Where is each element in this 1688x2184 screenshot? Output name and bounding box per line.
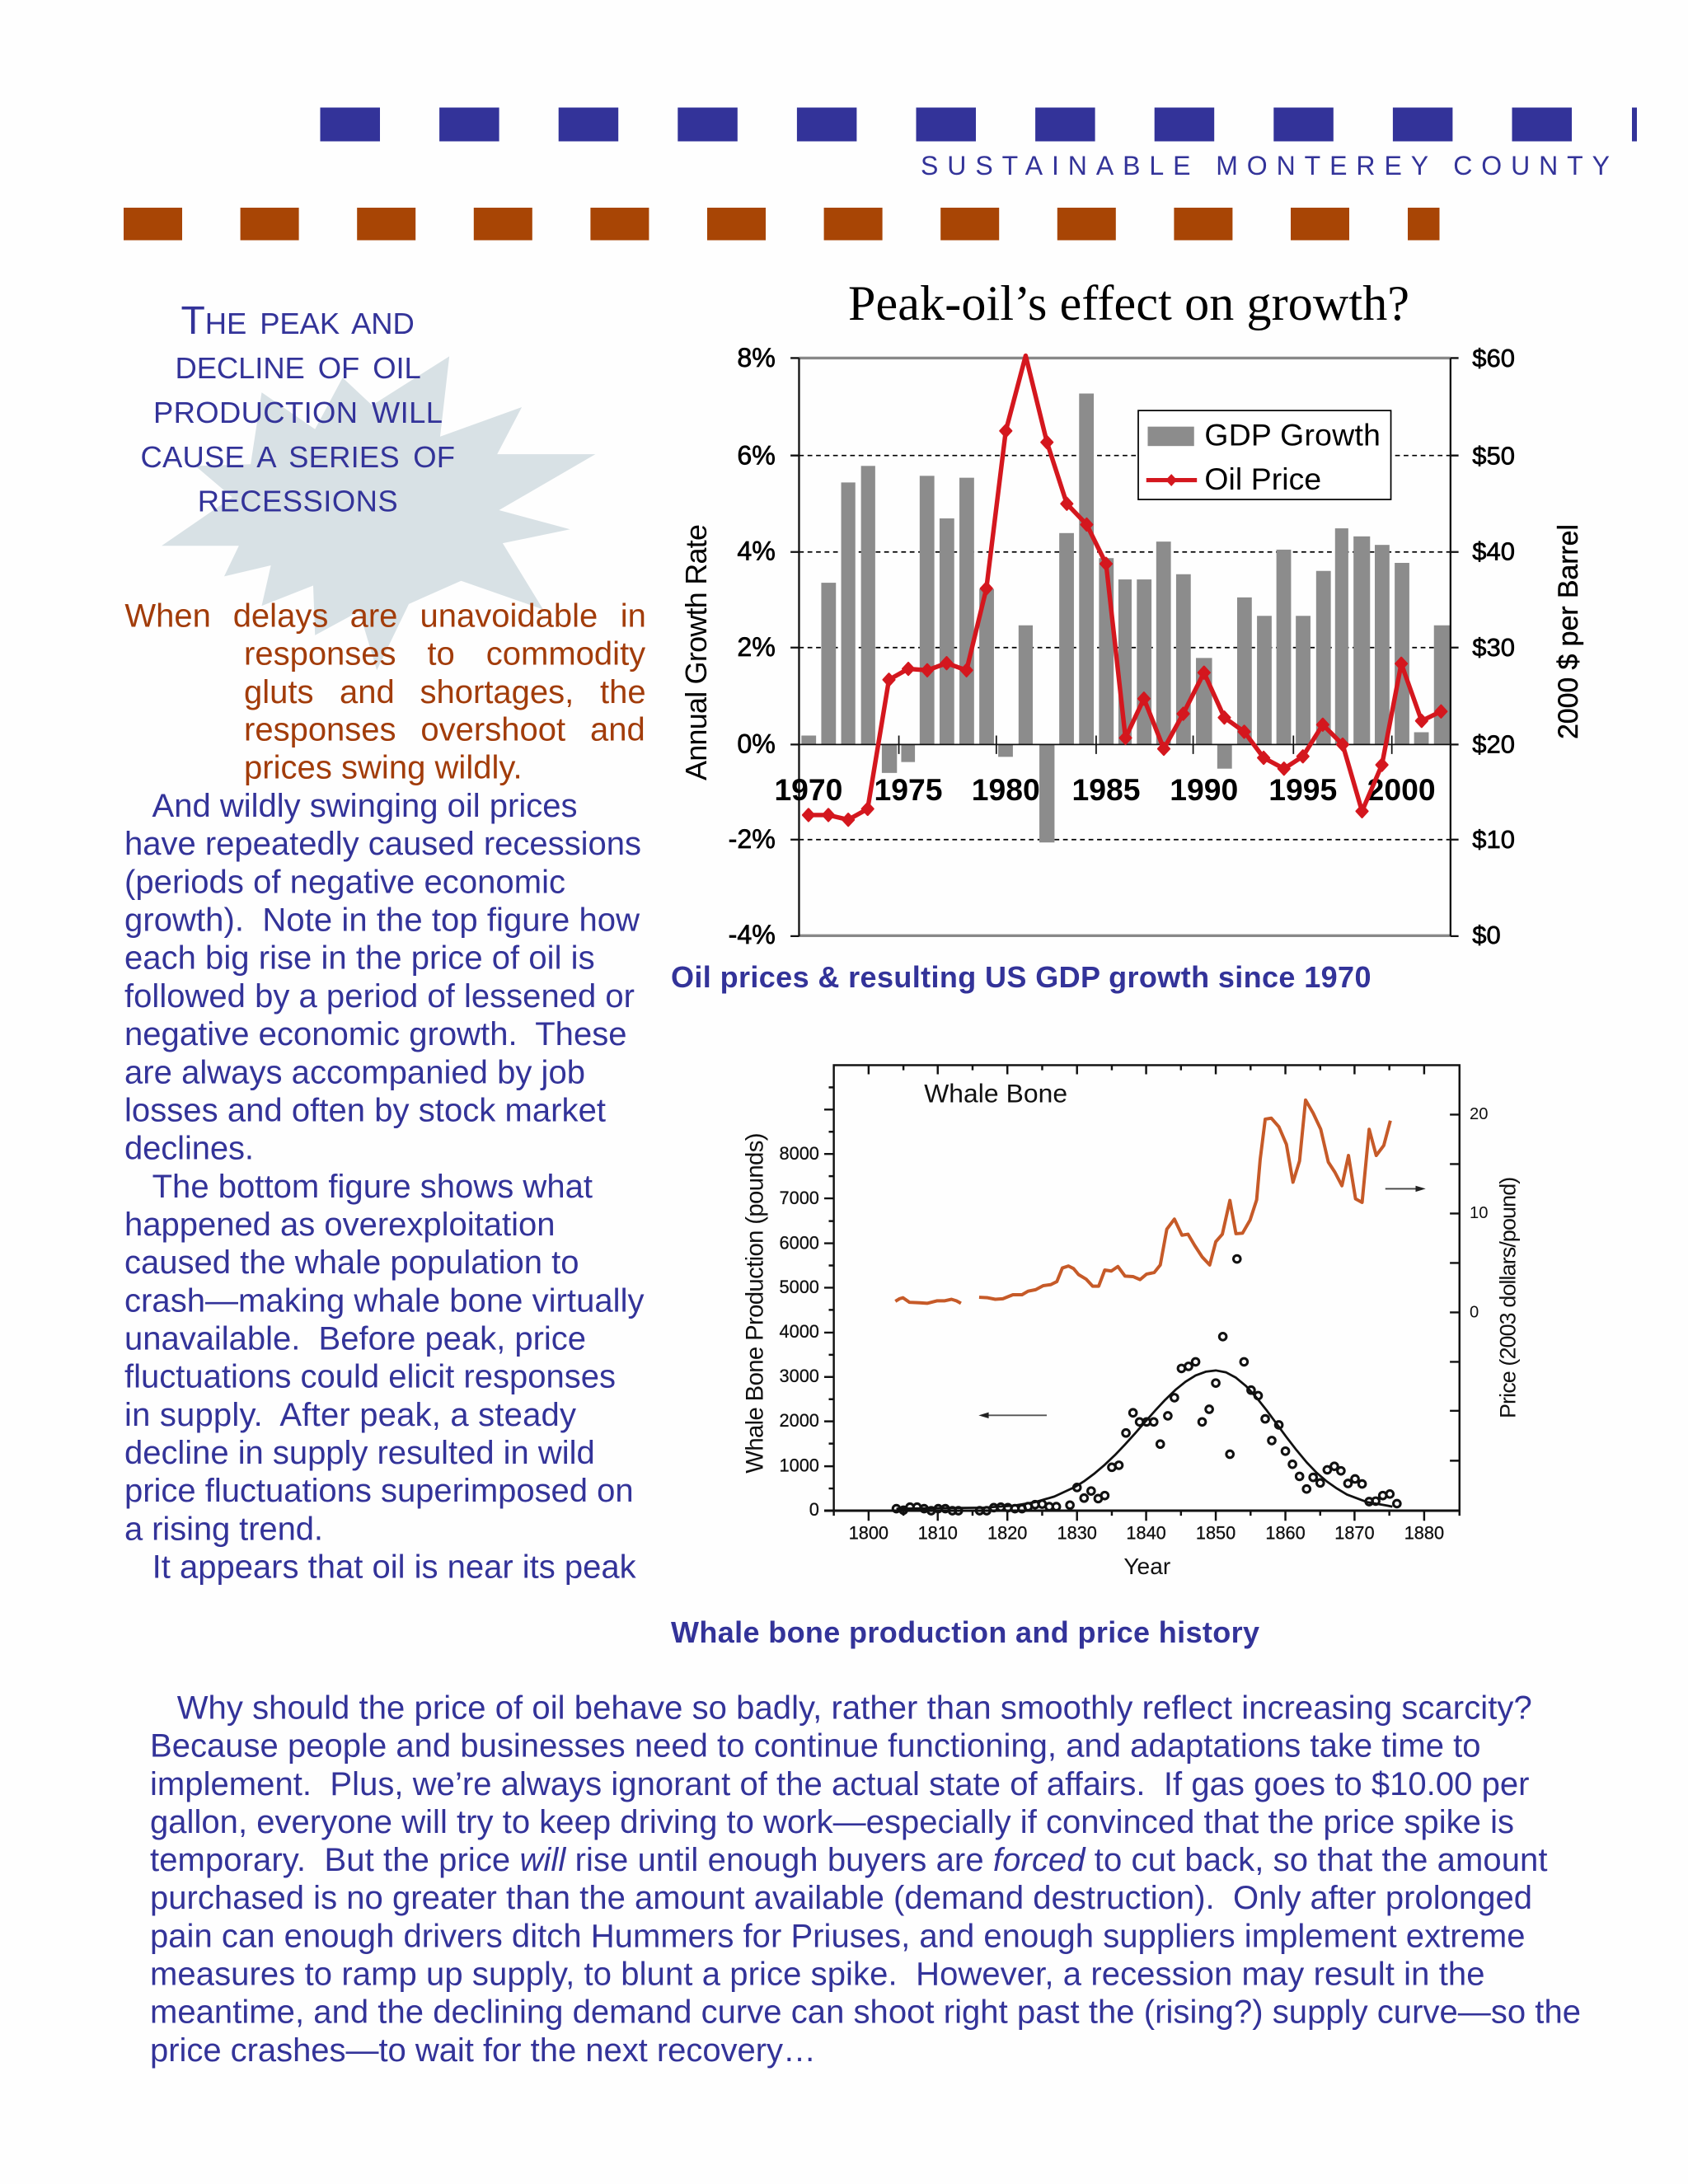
series label: Whale Bone [924, 1079, 1067, 1108]
text block: delays paragraph: overshoot [420, 712, 565, 748]
text block: delays paragraph: unavoidable [420, 598, 598, 635]
text block: delays paragraph: in [621, 598, 646, 635]
text block: left column body: are always accompanied by job [124, 1054, 585, 1090]
text block: bottom paragraph: gallon, everyone will try to keep driving to work—especially if convinced that the price spike is [150, 1804, 1514, 1840]
left axis labels: 2000 [780, 1410, 819, 1431]
text block: left column body: decline in supply resulted in wild [124, 1435, 595, 1471]
left axis labels: 8% [737, 343, 776, 373]
left axis title: Whale Bone Production (pounds) [741, 1132, 768, 1474]
right axis labels: 10 [1470, 1204, 1488, 1222]
fitted production curve [897, 1371, 1392, 1509]
right axis labels: $20 [1472, 730, 1515, 759]
left axis labels: 8000 [780, 1143, 819, 1164]
chart: oil prices and GDP growth [679, 343, 1584, 949]
text block: left column body: The bottom figure shows what [152, 1169, 593, 1205]
text block: left column body: losses and often by stock market [124, 1092, 606, 1128]
text block: left column body: (periods of negative economic [124, 864, 565, 900]
year labels: 1985 [1071, 772, 1140, 807]
text block: delays paragraph: responses [244, 636, 396, 673]
GDP growth bars [801, 393, 1451, 842]
x axis labels: 1870 [1334, 1522, 1375, 1543]
left axis labels: 1000 [780, 1455, 819, 1475]
caption: oil chart: Oil prices & resulting US GDP growth since 1970 [671, 960, 1372, 994]
text block: left column body: fluctuations could elicit responses [124, 1359, 616, 1395]
x axis labels: 1800 [849, 1522, 889, 1543]
text block: delays paragraph: gluts [244, 674, 313, 710]
text block: bottom paragraph: purchased is no greater than the amount available (demand destruction). Only after prolonged [150, 1880, 1532, 1916]
x axis labels: 1880 [1404, 1522, 1444, 1543]
year labels: 1995 [1268, 772, 1337, 807]
production data points [893, 1255, 1400, 1514]
text block: delays paragraph: prices swing wildly. [244, 750, 523, 786]
text block: delays paragraph: and [340, 674, 395, 710]
text block: delays paragraph: When [124, 598, 211, 635]
text block: bottom paragraph: pain can enough drivers ditch Hummers for Priuses, and enough suppliers implement extreme [150, 1918, 1525, 1954]
year labels: 1990 [1170, 772, 1238, 807]
text block: bottom paragraph [150, 1690, 1581, 2069]
right axis labels: $10 [1472, 825, 1515, 854]
left axis title: Annual Growth Rate [679, 524, 713, 780]
right axis labels [1470, 1105, 1488, 1322]
text block: delays paragraph: responses [244, 712, 396, 748]
left axis labels: 4000 [780, 1321, 819, 1342]
text block: left column body: happened as overexploitation [124, 1207, 556, 1243]
text block: bottom paragraph: Why should the price of oil behave so badly, rather than smoothly reflect increasing scarcity? [177, 1690, 1532, 1726]
text block: delays paragraph: shortages, [420, 674, 574, 710]
text block: bottom paragraph: meantime, and the declining demand curve can shoot right past the (rising?) supply curve—so the [150, 1994, 1581, 2031]
left axis labels: 0% [737, 729, 776, 759]
text block: delays paragraph [124, 598, 646, 786]
left axis labels: 7000 [780, 1188, 819, 1208]
text block: left column body: each big rise in the price of oil is [124, 940, 595, 977]
right axis labels: 0 [1470, 1304, 1479, 1322]
chart: whale bone production and price [741, 1065, 1521, 1579]
year labels: 1970 [774, 772, 842, 807]
oil price line [803, 356, 1447, 826]
right axis labels: $50 [1472, 442, 1515, 471]
left axis labels: 2% [737, 632, 776, 662]
text block: delays paragraph: the [600, 674, 646, 710]
year labels: 2000 [1367, 772, 1436, 807]
right axis labels: $60 [1472, 344, 1515, 373]
text block: bottom paragraph: implement. Plus, we’re always ignorant of the actual state of affairs. If gas goes to $10.00 per [150, 1766, 1530, 1802]
x axis labels: 1830 [1057, 1522, 1097, 1543]
arrow: production to left axis [978, 1413, 1047, 1418]
heading: peak and decline: DECLINE OF OIL [175, 351, 421, 385]
text block: bottom paragraph: Because people and businesses need to continue functioning, and adaptations take time to [150, 1727, 1480, 1764]
caption: whale chart: Whale bone production and price history [671, 1615, 1259, 1649]
heading: peak and decline: PRODUCTION WILL [153, 396, 443, 429]
left axis labels: 4% [737, 537, 776, 566]
x axis labels: 1810 [918, 1522, 958, 1543]
text block: left column body: caused the whale population to [124, 1244, 579, 1281]
heading: peak and decline: CAUSE A SERIES OF [140, 440, 455, 474]
right axis labels: 20 [1470, 1105, 1488, 1123]
heading: peak and decline: RECESSIONS [198, 484, 398, 518]
left axis labels [729, 343, 776, 949]
frame and ticks [824, 1065, 1460, 1521]
text block: left column body: followed by a period of lessened or [124, 978, 635, 1015]
x axis labels [849, 1522, 1444, 1543]
text block: left column body: It appears that oil is near its peak [152, 1549, 637, 1586]
left axis labels: -2% [729, 824, 776, 854]
text block: left column body [124, 788, 645, 1586]
text block: left column body: declines. [124, 1131, 254, 1167]
text block: left column body: price fluctuations superimposed on [124, 1473, 634, 1509]
legend: Oil Price [1204, 462, 1321, 496]
right axis title: Price (2003 dollars/pound) [1496, 1177, 1521, 1418]
text block: delays paragraph: to [427, 636, 455, 673]
starburst shape behind heading [162, 356, 595, 670]
x axis title: Year [1123, 1554, 1170, 1579]
text block: left column body: a rising trend. [124, 1511, 323, 1547]
chart frame and axes [790, 358, 1459, 936]
left axis labels [780, 1143, 819, 1520]
x axis labels: 1860 [1265, 1522, 1306, 1543]
x axis labels: 1850 [1196, 1522, 1236, 1543]
x axis labels: 1820 [987, 1522, 1027, 1543]
left axis labels: -4% [729, 920, 776, 949]
legend [1138, 410, 1391, 499]
left axis labels: 6% [737, 441, 776, 471]
year labels: 1975 [874, 772, 943, 807]
right axis labels: $0 [1472, 921, 1501, 949]
right axis labels [1472, 344, 1515, 949]
text block: left column body: negative economic growth. These [124, 1016, 626, 1052]
left axis labels: 6000 [780, 1232, 819, 1253]
heading: peak and decline: THE PEAK AND [181, 299, 415, 343]
heading: peak and decline [140, 299, 455, 518]
header band: blue dashes [320, 107, 1637, 142]
text block: left column body: in supply. After peak, a steady [124, 1397, 576, 1433]
left axis labels: 3000 [780, 1366, 819, 1386]
text block: bottom paragraph: temporary. But the price will rise until enough buyers are forced to cut back, so that the amount [150, 1842, 1548, 1878]
text block: delays paragraph: delays [233, 598, 328, 635]
text block: bottom paragraph: price crashes—to wait for the next recovery… [150, 2032, 816, 2069]
text block: left column body: crash—making whale bone virtually [124, 1282, 645, 1319]
right axis labels: $40 [1472, 537, 1515, 566]
x axis labels: 1840 [1126, 1522, 1166, 1543]
chart title: Peak-oil’s effect on growth? [848, 276, 1409, 330]
dashed gridlines [799, 456, 1451, 840]
text block: left column body: And wildly swinging oil prices [152, 788, 577, 824]
text block: delays paragraph: are [350, 598, 397, 635]
text block: left column body: unavailable. Before peak, price [124, 1320, 586, 1357]
right axis labels: $30 [1472, 633, 1515, 662]
legend: GDP Growth [1204, 418, 1381, 452]
text block: left column body: have repeatedly caused recessions [124, 826, 641, 862]
header band: orange dashes [124, 208, 1439, 241]
text block: bottom paragraph: measures to ramp up supply, to blunt a price spike. However, a recession may result in the [150, 1957, 1485, 1993]
arrow: price to right axis [1386, 1186, 1426, 1192]
left axis labels: 0 [809, 1499, 819, 1520]
price line [895, 1100, 1390, 1303]
text block: delays paragraph: commodity [486, 636, 645, 673]
right axis title: 2000 $ per Barrel [1553, 524, 1584, 739]
left axis labels: 5000 [780, 1277, 819, 1297]
text block: left column body: growth). Note in the top figure how [124, 902, 640, 938]
text block: delays paragraph: and [590, 712, 645, 748]
year labels: 1980 [972, 772, 1040, 807]
organisation name: SUSTAINABLE MONTEREY COUNTY [921, 151, 1610, 180]
year labels [774, 772, 1436, 807]
